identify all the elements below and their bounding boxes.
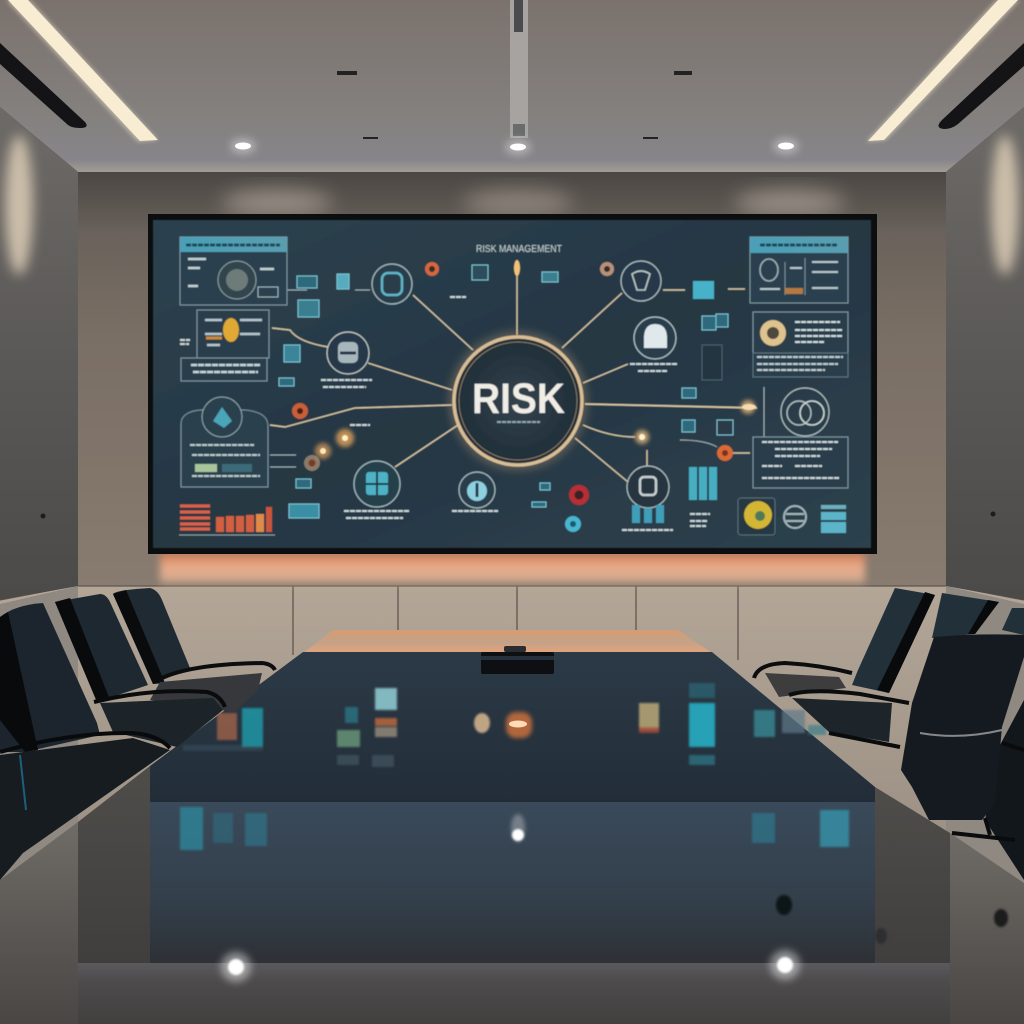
table light reflections: [221, 814, 1008, 982]
panel: lower left: [181, 397, 268, 487]
ceiling light strip right: [866, 0, 1020, 142]
right stacked bars: [821, 505, 846, 533]
left bar chart: [179, 506, 275, 535]
table outer left band: [0, 822, 78, 1024]
screen reflection on table: [180, 683, 849, 850]
chair: near right: [829, 634, 1024, 880]
ceiling vent right: [938, 43, 1024, 129]
chair: far left: [113, 588, 275, 712]
chair: middle right: [789, 593, 999, 742]
chair: far right: [754, 588, 935, 697]
panel: upper left: [180, 237, 287, 305]
screen heading: RISK MANAGEMENT: [476, 244, 562, 255]
right side wall: [946, 107, 1024, 600]
downlights: [230, 71, 799, 155]
table inner left band: [78, 766, 150, 1024]
chair: middle left: [55, 594, 225, 747]
panel: middle left: [197, 310, 269, 358]
ceiling light strip left: [6, 0, 158, 142]
risk node icons right: [621, 261, 829, 523]
chair: near left: [0, 603, 170, 880]
back wall: [78, 172, 946, 587]
far wood table end: [303, 630, 712, 653]
central risk hub: [448, 331, 588, 471]
small teal icons: [279, 265, 733, 518]
conference table surface: [0, 652, 1024, 1024]
left side wall: [0, 107, 78, 600]
screen frame: [148, 214, 877, 554]
connector lines: [270, 267, 764, 482]
node labels: [180, 297, 710, 530]
center ceiling fixture: [510, 0, 528, 138]
table near reflection: [150, 802, 875, 963]
risk node icons left: [327, 264, 495, 508]
display screen: [153, 220, 871, 548]
ceiling vent left: [0, 43, 87, 128]
table inner right band: [875, 787, 950, 1024]
panel: upper right: [750, 237, 848, 303]
risk title: RISK: [472, 375, 565, 423]
tabletop device: [481, 646, 554, 674]
panel: left caption: [181, 358, 267, 381]
panel: lower right: [753, 437, 848, 488]
gold badge: [738, 498, 775, 535]
orange warning dots: [292, 262, 733, 532]
chair: rear right: [1002, 608, 1024, 635]
wall light washes: [5, 135, 1019, 275]
table outer right band: [950, 833, 1024, 1024]
glowing nodes: [315, 260, 756, 459]
table far reflection: [150, 652, 875, 802]
panel: middle right: [753, 312, 848, 377]
wall sensors: [40, 512, 996, 518]
glow beneath screen: [160, 552, 865, 583]
right teal bar chart: [689, 467, 717, 500]
lower wall panels: [0, 585, 1024, 906]
table front band: [78, 963, 950, 1024]
small circular icon: [784, 506, 806, 528]
ceiling: [0, 0, 1024, 172]
